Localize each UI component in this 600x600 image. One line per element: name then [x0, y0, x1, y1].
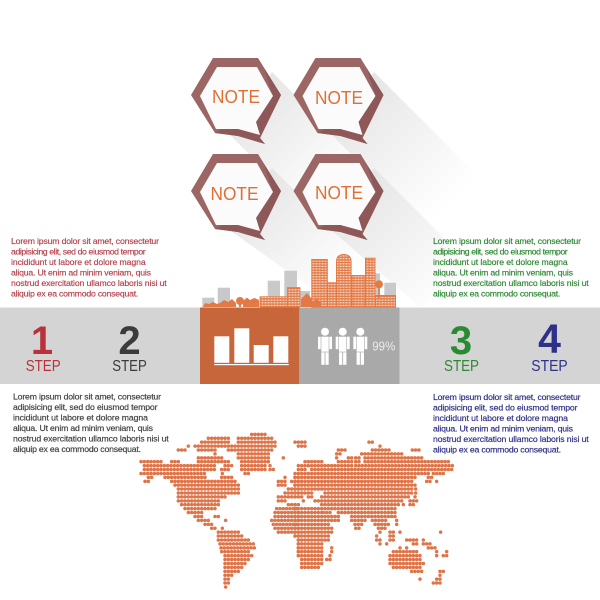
step band [0, 308, 600, 384]
text block: navy: adipisicing elit, sed do eiusmod tempor [433, 402, 578, 412]
bars [214, 328, 289, 365]
text block: red: nostrud exercitation ullamco laboris nisi ut [11, 278, 167, 288]
text block: green: incididunt ut labore et dolore magna [433, 257, 568, 267]
percentage: 99% [372, 339, 395, 353]
city skyline [202, 254, 396, 307]
round sign on post [375, 280, 383, 298]
text block: green: adipisicing elit, sed do eiusmod tempor [433, 246, 568, 256]
note badge 2 [294, 58, 384, 144]
text block: dark [13, 392, 169, 454]
note badge 3 [191, 154, 281, 240]
long shadows behind note badges [228, 72, 490, 307]
person icon 2 [336, 328, 350, 365]
panel: bar chart [200, 308, 299, 384]
step 2 [112, 319, 147, 375]
text block: dark: aliquip ex ea commodo consequat. [13, 444, 141, 454]
note badge 2: NOTE [315, 88, 363, 108]
step 1: STEP [26, 358, 61, 375]
person icon 1 [318, 328, 332, 365]
text block: red: incididunt ut labore et dolore magna [11, 257, 146, 267]
text block: dark: adipisicing elit, sed do eiusmod tempor [13, 402, 158, 412]
dotted world map [141, 434, 455, 587]
background grey towers [202, 271, 396, 307]
text block: navy: aliqua. Ut enim ad minim veniam, quis [433, 424, 574, 434]
note badge 3: NOTE [210, 184, 258, 204]
text block: green: Lorem ipsum dolor sit amet, consectetur [433, 236, 581, 246]
text block: red: Lorem ipsum dolor sit amet, consectetur [11, 236, 159, 246]
note badge 4 [294, 154, 384, 240]
person icon 3 [353, 328, 367, 365]
step 1: 1 [31, 319, 53, 363]
step 3: 3 [450, 319, 472, 363]
text block: dark: aliqua. Ut enim ad minim veniam, quis [13, 423, 154, 433]
step 1 [26, 319, 61, 375]
step 4 [531, 316, 568, 375]
text block: dark: Lorem ipsum dolor sit amet, consectetur [13, 392, 161, 402]
step 3: STEP [444, 358, 479, 375]
text block: navy: aliquip ex ea commodo consequat. [433, 444, 561, 454]
step 2: 2 [118, 319, 141, 363]
text block: green: nostrud exercitation ullamco laboris nisi ut [433, 278, 589, 288]
text block: red: aliqua. Ut enim ad minim veniam, quis [11, 268, 152, 278]
text block: dark: incididunt ut labore et dolore magna [13, 412, 148, 422]
text block: red: adipisicing elit, sed do eiusmod tempor [11, 246, 146, 256]
text block: navy: nostrud exercitation ullamco laboris nisi ut [433, 434, 589, 444]
text block: green [433, 236, 589, 298]
text block: navy: Lorem ipsum dolor sit amet, consectetur [433, 392, 581, 402]
panel: people statistic [299, 308, 400, 384]
step 2: STEP [112, 358, 147, 375]
text block: red: aliquip ex ea commodo consequat. [11, 288, 138, 298]
step 4: 4 [538, 316, 561, 362]
tall orange buildings [312, 254, 396, 307]
note badge 4: NOTE [315, 183, 363, 203]
text block: navy [433, 392, 589, 454]
text block: green: aliquip ex ea commodo consequat. [433, 288, 560, 298]
americas and greenland [141, 434, 299, 587]
step 3 [444, 319, 479, 375]
step 4: STEP [531, 358, 568, 375]
low orange town [203, 288, 321, 307]
europe africa asia australia [295, 442, 455, 583]
text block: navy: incididunt ut labore et dolore magna [433, 413, 568, 423]
note badge 1 [191, 58, 281, 144]
text block: red [11, 236, 167, 298]
text block: green: aliqua. Ut enim ad minim veniam, quis [433, 268, 574, 278]
note badge 1: NOTE [212, 87, 260, 107]
text block: dark: nostrud exercitation ullamco laboris nisi ut [13, 434, 169, 444]
